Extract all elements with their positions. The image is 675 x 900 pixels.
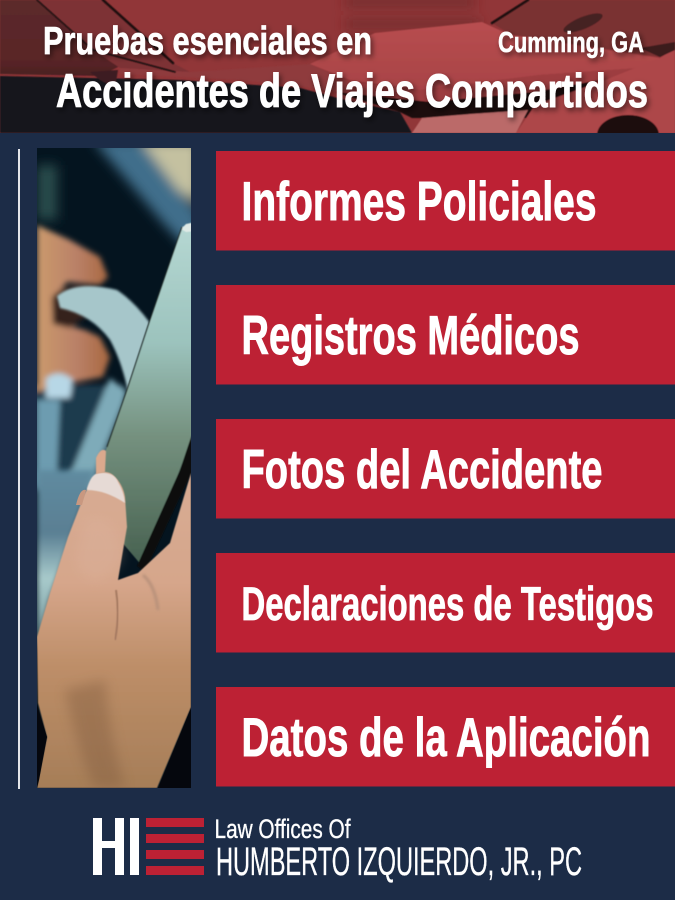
logo mark: HI with stripes — [93, 818, 204, 875]
photo: hand holding phone in car — [37, 148, 191, 788]
item: app data — [216, 687, 675, 786]
header banner: red-tinted crash photo — [0, 0, 675, 133]
vertical rule — [18, 149, 20, 789]
item: accident photos — [216, 419, 675, 518]
dark corners — [37, 705, 191, 788]
phone — [104, 222, 191, 570]
lower background — [37, 470, 95, 650]
hand — [37, 450, 191, 788]
item: medical records — [216, 285, 675, 384]
firm name — [214, 814, 582, 884]
header title — [43, 20, 648, 117]
heading line one: Pruebas esenciales en — [43, 20, 372, 63]
item: police reports — [216, 151, 675, 250]
item: witness statements — [216, 553, 675, 652]
evidence list — [216, 151, 675, 786]
firm name: Law Offices Of — [214, 814, 351, 844]
footer logo — [93, 814, 582, 884]
